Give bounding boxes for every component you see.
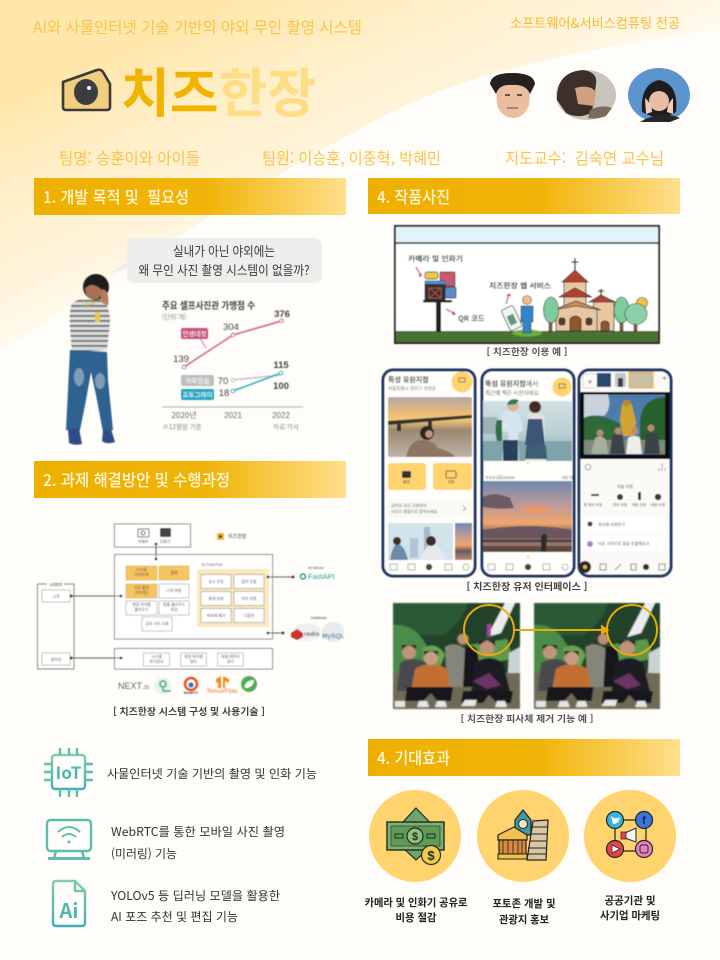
speech bubble: 실내가 아닌 야외에는 [173, 241, 275, 260]
label: QR code: QR 코드 [458, 313, 485, 324]
chart axis labels: 자료:각사 [273, 421, 299, 431]
effect caption: marketing: 공공기관 및 [604, 893, 656, 908]
thumbnail strip [583, 372, 667, 388]
admin box [114, 648, 272, 669]
team photo 2 [556, 70, 616, 120]
home action buttons [388, 463, 472, 490]
icon: wifi monitor [47, 820, 91, 858]
effect caption: cost: 카메라 및 인화기 공유로 [364, 895, 468, 910]
heading: section 4 photos: 4. 작품사진 [377, 184, 450, 208]
chart labels [181, 328, 214, 400]
heading: section 1: 1. 개발 목적 및 필요성 [43, 184, 189, 208]
home list row: 김미선 사진 규정되어 [391, 502, 427, 509]
church [553, 258, 615, 331]
phone mockup: recent photos: 최근에 찍은 사진이에요. [485, 389, 541, 397]
home action buttons: 인화 [448, 479, 455, 485]
chart values: 139 [173, 354, 189, 365]
admin box: 관리 [227, 659, 234, 665]
feature text: mirroring: (미러링) 기능 [111, 845, 177, 862]
heading: expected effects [368, 739, 680, 776]
chart axis labels [162, 410, 299, 431]
effect caption: marketing: 사기업 마케팅 [600, 908, 660, 923]
chart values: 304 [223, 322, 239, 333]
server logos: Database [311, 616, 327, 620]
editor nav bar [579, 561, 665, 573]
home photo [388, 397, 472, 457]
AI function panel: 피부 보정 [241, 596, 257, 602]
connector arrows [70, 543, 294, 659]
effect icon: social marketing [584, 790, 676, 882]
line chart: photo booth franchise counts: (단위:개) [162, 311, 186, 321]
thumbnail strip: + [587, 377, 593, 387]
feature text: IoT: 사물인터넷 기술 기반의 촬영 및 인화 기능 [107, 765, 317, 782]
home list row: 사진기 명령으로 알려보세요 [391, 508, 438, 515]
device box [114, 524, 190, 547]
feature text: WebRTC: WebRTC를 통한 모바일 사진 촬영 [111, 823, 285, 840]
editor controls: 자동 보정 [617, 483, 633, 490]
editor controls [581, 463, 668, 551]
team photo 3 [628, 68, 690, 122]
legend: logo [217, 533, 247, 540]
logo wordmark: 치즈한장 [121, 52, 316, 128]
AI function panel: AI Function [201, 562, 223, 568]
server logos: redis [304, 631, 320, 638]
illustration: worried boy [66, 274, 115, 445]
user box: 고객 [52, 594, 60, 600]
server logos [291, 566, 344, 642]
chart values: 18 [219, 388, 229, 399]
editor controls: 피부 보정 [613, 502, 627, 508]
editor controls: 톤 왜곡 보정 [584, 502, 602, 508]
series: pink [182, 319, 283, 369]
main service box: 이어트레 [135, 572, 149, 578]
series: blue [231, 371, 283, 393]
heading: section 2: 2. 과제 해결방안 및 수행과정 [43, 467, 230, 491]
effect icon: tourism landmarks [477, 790, 569, 882]
user box: USER [50, 582, 63, 587]
person with phone [501, 296, 542, 336]
effect icon: cost saving [369, 790, 461, 882]
heading: expected effects: 4. 기대효과 [377, 745, 450, 769]
system architecture diagram [38, 524, 344, 695]
admin box: 위험/데이터 [221, 654, 240, 660]
main service box: 공유 사진 조회 [145, 621, 169, 627]
server logos: FastAPI [308, 572, 335, 581]
chart values [173, 309, 290, 399]
effect caption: tourism [492, 896, 556, 927]
selected group photo [580, 392, 670, 459]
AI function panel: 왕색 보정 [208, 596, 224, 602]
main service box: 현장 아이템 [132, 602, 151, 608]
effect icon: cost saving: $ [427, 848, 435, 863]
effect caption: cost [364, 895, 468, 925]
effect caption: tourism: 포토존 개발 및 [492, 896, 556, 911]
chart values: 100 [273, 381, 289, 392]
user box: 관리자 [51, 657, 62, 663]
icon: AI file [53, 881, 85, 926]
effect caption: cost: 비용 절감 [396, 910, 437, 925]
legend: logo: 치즈한장 [228, 533, 247, 540]
main service box: 결제 [170, 570, 178, 576]
chart labels: 포토그레이 [183, 389, 212, 399]
main service box: 최종 클라우드 [163, 602, 186, 608]
recent nav bar [488, 556, 568, 570]
label: camera and printer: 카메라 및 인화기 [408, 254, 463, 264]
editor controls: 피사체 지워주기 [598, 521, 625, 528]
AI function panel: 피사체 제거 [207, 613, 225, 619]
main service box [114, 554, 272, 639]
kiosk [423, 272, 456, 332]
icon: IoT chip [44, 748, 93, 797]
main service box: (미러링) [135, 590, 148, 596]
effect icon: social marketing: f [642, 815, 646, 827]
AI function panel: 디퓨전 [244, 613, 255, 619]
photo: after object removal [534, 603, 660, 709]
dots and date label: 4장 더 [562, 474, 573, 481]
device box: 인화기 [160, 539, 170, 545]
illustration: usage scene [395, 226, 659, 343]
device box: 카메라 [138, 539, 149, 545]
phone mockup: recent photos [482, 370, 574, 576]
effect icon: cost saving: $ [412, 831, 418, 843]
heading: section 1 [34, 178, 346, 215]
phone mockup: recent photos: 뚝섬 유원지점에서 [485, 379, 538, 389]
effect caption: marketing [600, 893, 660, 923]
caption: UI: [ 치즈한장 유저 인터페이스 ] [466, 579, 588, 593]
series: gray [231, 375, 281, 382]
team photo 1 [490, 73, 535, 118]
chart axis labels: 2021 [224, 411, 242, 420]
chart labels: 인생네컷 [183, 328, 206, 338]
main service box: 나의 취향 [166, 588, 182, 594]
phone mockup: home screen: 특성 유원지점 [388, 375, 429, 385]
technology logos: NEXT.JS [118, 681, 150, 691]
AI function panel [197, 562, 269, 627]
caption: usage: [ 치즈한장 이용 예 ] [486, 345, 568, 358]
heading: section 2 [34, 461, 346, 498]
chart values: 376 [274, 309, 290, 320]
advisor: 지도교수: 김숙연 교수님 [505, 145, 664, 169]
line chart: photo booth franchise counts [162, 298, 303, 431]
chart values: 70 [218, 376, 228, 387]
admin box: 위치관리 [150, 659, 163, 665]
dots and date label: '5'a's'a일2ue2e [485, 474, 515, 480]
home nav bar [390, 564, 469, 570]
chart axis labels: 2020년 [171, 410, 197, 421]
label: web service: 치즈한장 웹 서비스 [489, 281, 552, 291]
editor controls: 체형 보정 [632, 502, 646, 508]
icon: IoT chip: IoT [56, 759, 82, 784]
line chart: photo booth franchise counts: 주요 셀프사진관 가맹점 수 [162, 298, 255, 312]
home list row [388, 499, 472, 518]
feature text: YOLOv5: YOLOv5 등 딥러닝 모델을 활용한 [110, 887, 280, 904]
arrows: red pointers [416, 267, 511, 314]
chart labels: 하루필름 [186, 375, 209, 385]
subtitle: project description: AI와 사물인터넷 기술 기반의 야외 무인 촬영 시스템 [33, 14, 362, 38]
photo: before object removal [393, 603, 520, 709]
editor controls: 채광 보정 [651, 502, 665, 508]
chart axis labels: 2022 [272, 411, 290, 420]
couple photo [483, 399, 572, 461]
user box [38, 582, 74, 669]
editor controls: 다운 사진으로 얼굴 추출해요기 [598, 540, 650, 547]
phone mockup: home screen [383, 370, 475, 576]
team members: 팀원: 이승훈, 이중혁, 박혜민 [262, 145, 441, 169]
home action buttons: 촬영 [403, 479, 410, 485]
feature text: AI pose: AI 포즈 추천 및 편집 기능 [111, 908, 238, 925]
team name: 팀명: 승훈이와 아이들 [59, 145, 200, 169]
home gallery [388, 523, 472, 560]
dusk photo [483, 481, 572, 552]
technology logos: TensorFlow [207, 689, 238, 695]
speech bubble: 왜 무인 사진 촬영 시스템이 없을까? [138, 260, 310, 279]
heading: section 4 photos [368, 178, 680, 214]
logo: cheese camera icon [63, 70, 110, 110]
highlight circles and arrow [464, 605, 657, 655]
admin box: 현장 아이템 [184, 654, 203, 660]
caption: object removal: [ 치즈한장 피사체 제거 기능 예 ] [460, 712, 594, 725]
server logos: MySQL [322, 633, 344, 640]
trees [544, 297, 648, 331]
effect caption: tourism: 관광지 홍보 [499, 912, 549, 927]
main service box: 불러오기 [135, 607, 148, 613]
dots and date label [485, 462, 573, 481]
server logos: AI Server [308, 566, 325, 570]
main service box: 저장 [170, 607, 178, 613]
main service box: 사진 촬영 [134, 585, 150, 591]
phone mockup: home screen: 서울특별시 광진구 자양동 [388, 385, 436, 392]
caption: system diagram: [ 치즈한장 시스템 구성 및 사용기술 ] [113, 704, 265, 718]
department label: 소프트웨어&서비스컴퓨팅 전공 [510, 12, 680, 32]
admin box: 관리 [190, 659, 197, 665]
icon: AI file: Ai [59, 895, 78, 924]
admin box: 시스템 [151, 654, 162, 660]
technology logos [118, 676, 257, 695]
phone mockup: photo editor [579, 370, 671, 576]
technology logos: WebRTC [184, 691, 199, 695]
chart axis labels: ※12월말 기준 [162, 421, 202, 431]
main service box: 시스템 [136, 567, 147, 573]
chart values: 115 [273, 360, 289, 371]
AI function panel: 얼라 추출 [241, 579, 257, 585]
speech bubble [111, 238, 322, 283]
AI function panel: 포즈 추천 [208, 579, 224, 585]
